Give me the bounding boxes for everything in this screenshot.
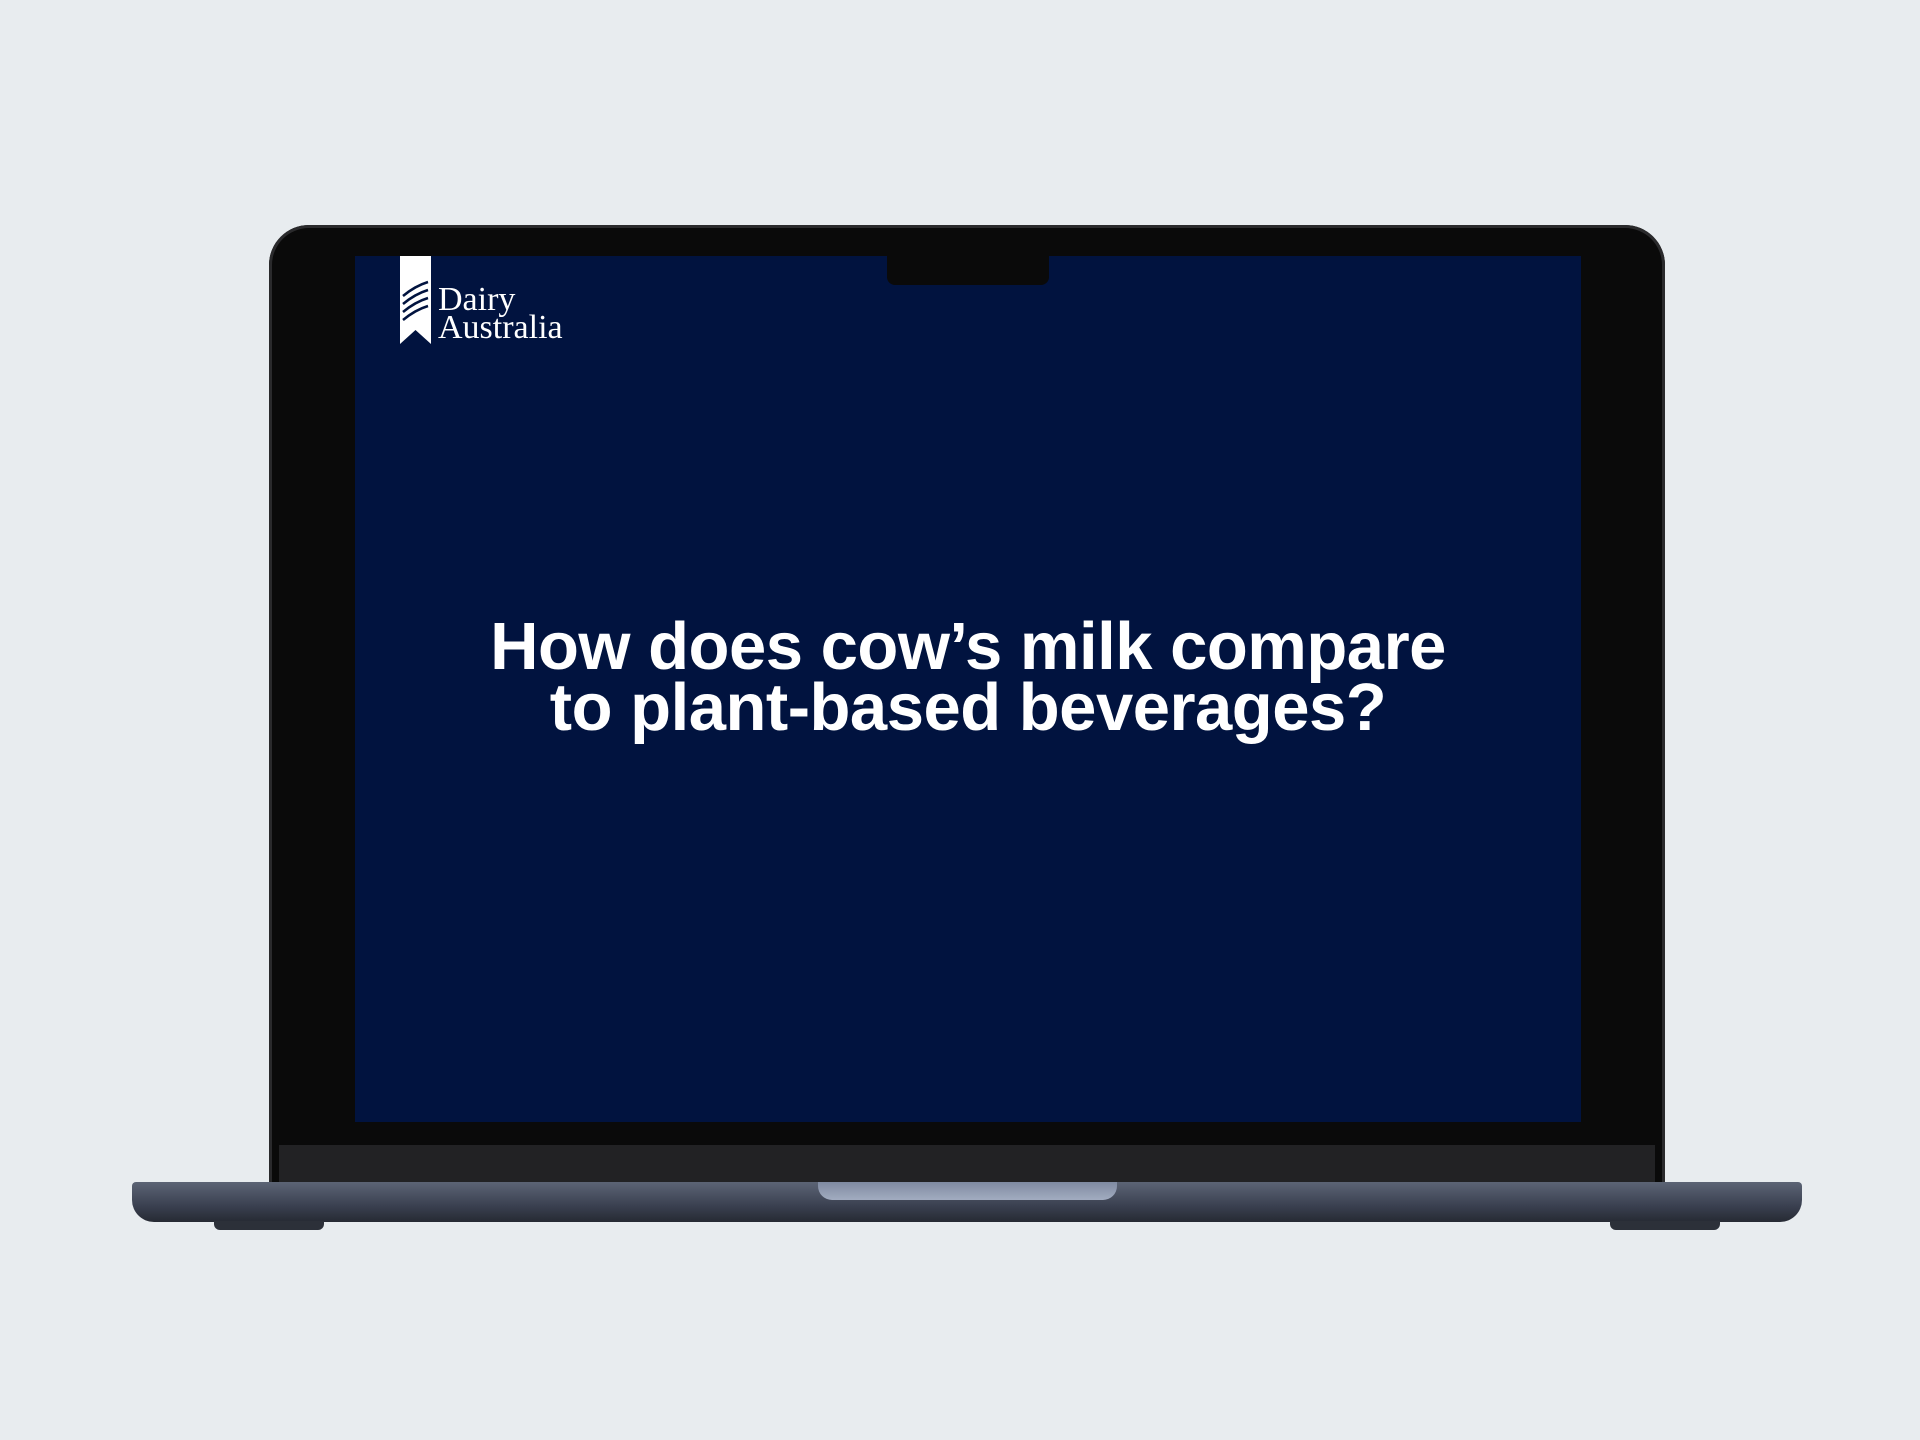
icon: bookmark bbox=[400, 256, 431, 344]
title: How does cow’s milk compare bbox=[490, 609, 1446, 684]
logo text: Dairy bbox=[438, 281, 515, 318]
logo text bbox=[438, 281, 563, 346]
laptop lid bbox=[269, 225, 1665, 1185]
title: to plant-based beverages? bbox=[550, 670, 1386, 745]
screen bbox=[355, 256, 1581, 1122]
camera notch bbox=[887, 250, 1049, 285]
laptop base bbox=[132, 1182, 1802, 1222]
feet bbox=[214, 1221, 324, 1230]
title bbox=[490, 609, 1446, 745]
logo text: Australia bbox=[438, 309, 563, 346]
hinge recess bbox=[818, 1182, 1117, 1200]
logo: Dairy Australia bbox=[400, 256, 563, 346]
screen bezel bottom strip bbox=[279, 1145, 1655, 1182]
